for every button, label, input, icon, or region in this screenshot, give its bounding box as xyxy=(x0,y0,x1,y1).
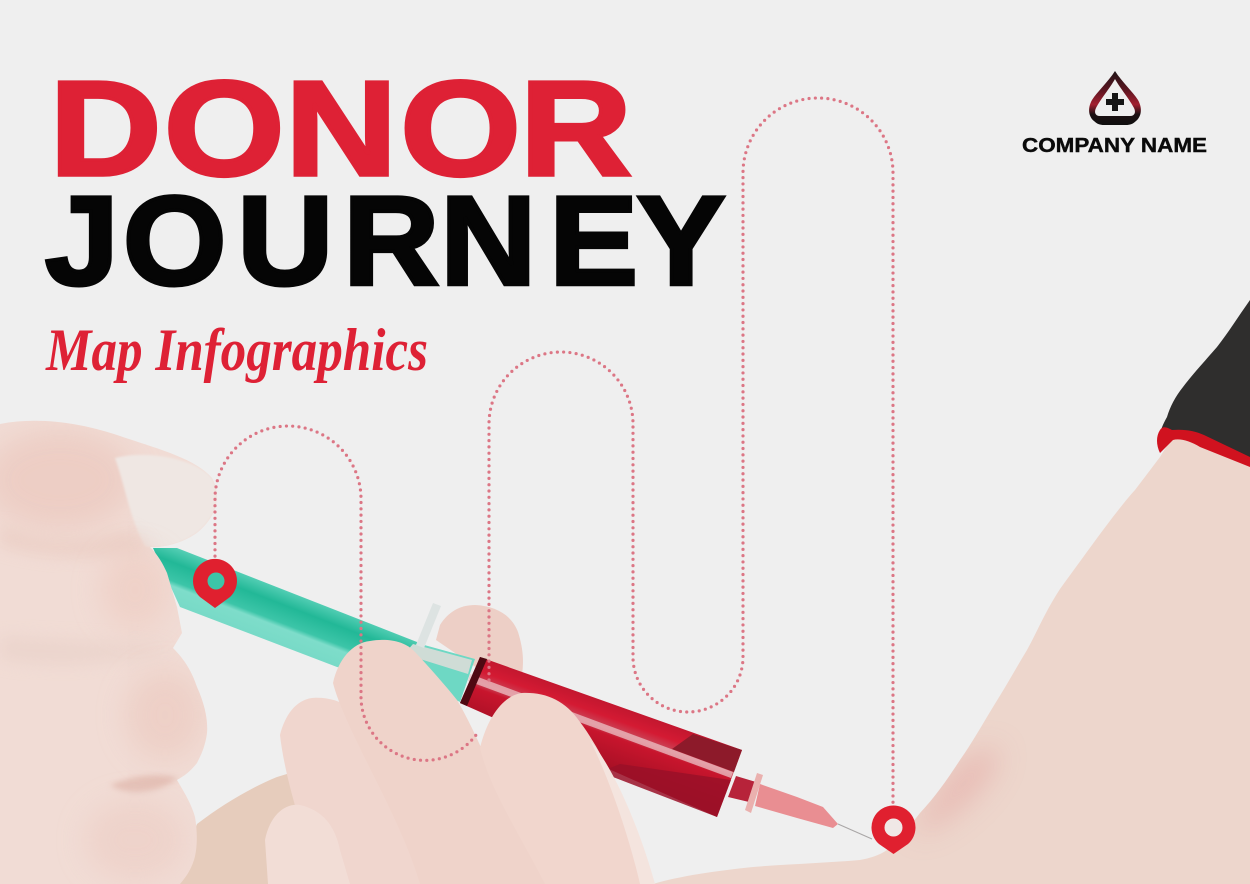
title: DONOR: DONOR xyxy=(49,53,632,204)
dotted journey route xyxy=(215,98,893,804)
photo: finger behind syringe xyxy=(436,605,523,675)
photo: back of hand xyxy=(175,770,420,884)
photo: donor arm xyxy=(653,436,1250,884)
photo: gloved left hand xyxy=(0,421,217,884)
photo: hands, syringe and arm xyxy=(0,300,1250,884)
icon: start map pin xyxy=(193,559,237,608)
photo: gloved fingers on the right hand xyxy=(265,640,655,884)
photo: black cuff with red trim xyxy=(1157,300,1250,467)
subtitle: Map Infographics: Map Infographics xyxy=(45,317,428,383)
photo: syringe teal barrel xyxy=(153,548,475,702)
icon: end map pin xyxy=(872,805,916,854)
logo: company name: COMPANY NAME xyxy=(1022,135,1207,157)
logo: blood drop with cross xyxy=(1089,71,1141,125)
photo: syringe blood barrel xyxy=(460,657,742,817)
title: JOURNEY: JOURNEY xyxy=(45,169,726,312)
photo: syringe needle and hub xyxy=(728,773,872,839)
